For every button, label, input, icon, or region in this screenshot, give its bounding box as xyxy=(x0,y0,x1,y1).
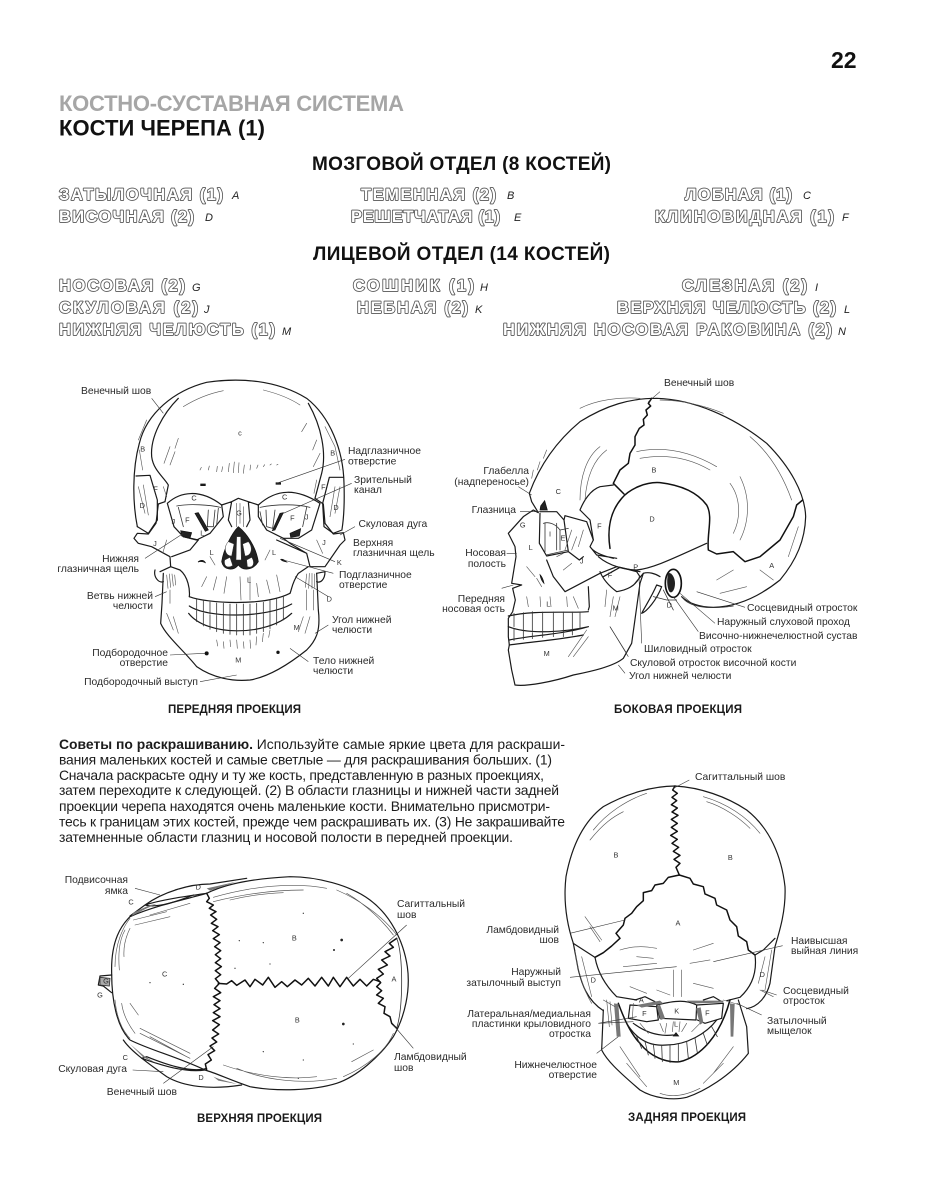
skull drawing: back view: M xyxy=(673,1078,679,1087)
skull drawing: side view: B xyxy=(652,466,657,475)
skull drawing: front view: C xyxy=(191,494,197,503)
legend: facial bones: N xyxy=(838,326,846,338)
labels: side view xyxy=(442,378,858,682)
skull drawing: front view: B xyxy=(140,445,145,454)
labels: back view: отросток xyxy=(783,996,825,1007)
labels: back view: пластинки крыловидного xyxy=(472,1019,591,1030)
legend: facial bones: ВЕРХНЯЯ ЧЕЛЮСТЬ (2) xyxy=(617,299,836,317)
skull drawing: top view: B xyxy=(292,933,297,942)
labels: back view: отростка xyxy=(549,1029,591,1040)
skull drawing: front view: L xyxy=(210,548,214,557)
labels: side view: Глабелла xyxy=(483,465,529,477)
coloring tips text block: затем переходите к следующей. (2) В области глазницы и нижней части задней xyxy=(59,782,559,798)
labels: back view: выйная линия xyxy=(791,946,858,957)
skull drawing: front view: C xyxy=(282,492,288,501)
skull drawing: side view: A xyxy=(769,561,774,570)
skull drawing: front view: L xyxy=(247,575,251,584)
coloring tips text block: затемненные области глазниц и носовой полости в передней проекции. xyxy=(59,829,513,845)
skull drawing: front view: F xyxy=(290,514,295,523)
legend: facial bones: НИЖНЯЯ ЧЕЛЮСТЬ (1) xyxy=(59,321,275,339)
labels: top view: Скуловая дуга xyxy=(58,1064,127,1075)
panel: side view xyxy=(442,378,858,716)
labels: back view: Сосцевидный xyxy=(783,986,849,997)
legend: facial bones: СКУЛОВАЯ (2) xyxy=(59,299,198,317)
skull drawing: back view: L xyxy=(674,1020,678,1029)
labels: top view: Подвисочная xyxy=(65,875,128,886)
skull drawing: top view: A xyxy=(392,974,397,983)
skull drawing: side view: D xyxy=(649,515,655,524)
labels: front view: челюсти xyxy=(332,625,372,636)
labels: side view: Венечный шов xyxy=(664,378,735,389)
labels: side view: Глазница xyxy=(472,505,516,516)
legend: cranial bones: A xyxy=(231,190,239,202)
labels: back view: мыщелок xyxy=(767,1026,812,1037)
coloring tips text block: вания маленьких костей и самые светлые — для раскрашивания больших. (1) xyxy=(59,752,552,768)
labels: front view: Ветвь нижней xyxy=(87,591,153,602)
skull drawing: front view: D xyxy=(327,595,332,604)
heading: facial division: ЛИЦЕВОЙ ОТДЕЛ (14 КОСТЕЙ) xyxy=(313,243,610,265)
skull drawing: top view xyxy=(97,877,413,1090)
legend: facial bones: H xyxy=(480,282,488,294)
labels: back view: Затылочный xyxy=(767,1016,827,1027)
labels: top view xyxy=(58,875,467,1098)
legend: facial bones: НИЖНЯЯ НОСОВАЯ РАКОВИНА (2) xyxy=(503,321,832,339)
heading: cranial division: МОЗГОВОЙ ОТДЕЛ (8 КОСТЕЙ) xyxy=(312,153,611,175)
skull drawing: front view: J xyxy=(171,517,175,526)
labels: back view: Ламбдовидный xyxy=(486,924,559,936)
labels: side view: Сосцевидный отросток xyxy=(747,603,858,614)
labels: top view: Ламбдовидный xyxy=(394,1051,467,1063)
skull drawing: front view: D xyxy=(140,501,145,510)
panel: top view xyxy=(58,875,467,1125)
labels: front view: Угол нижней xyxy=(332,615,392,626)
labels: front view: Тело нижней xyxy=(313,656,375,667)
skull drawing: back view: F xyxy=(705,1008,710,1017)
labels: back view xyxy=(466,772,858,1081)
skull drawing: side view: J xyxy=(580,556,584,565)
legend: facial bones: СЛЕЗНАЯ (2) xyxy=(682,277,807,295)
labels: side view: полость xyxy=(468,559,506,570)
labels: side view: (надпереносье) xyxy=(454,477,529,488)
legend: facial bones: НОСОВАЯ (2) xyxy=(59,277,185,295)
legend: cranial bones: D xyxy=(205,212,213,224)
skull drawing: front view: F xyxy=(185,515,190,524)
labels: top view: шов xyxy=(394,1063,414,1074)
labels: back view: Нижнечелюстное xyxy=(514,1060,597,1071)
skull drawing: side view: E xyxy=(561,534,566,543)
skull drawing: front view: M xyxy=(235,656,241,665)
legend: cranial bones xyxy=(59,186,850,226)
skull drawing: top view: B xyxy=(295,1016,300,1025)
labels: back view: Латеральная/медиальная xyxy=(467,1009,591,1020)
skull drawing: top view: C xyxy=(128,898,134,907)
panel: front view xyxy=(57,380,435,716)
legend: cranial bones: B xyxy=(507,190,514,202)
legend: facial bones: J xyxy=(203,304,210,316)
labels: top view: Венечный шов xyxy=(107,1087,178,1098)
labels: front view: глазничная щель xyxy=(57,564,139,575)
labels: back view: Наружный xyxy=(511,967,561,978)
skull drawing: top view: D xyxy=(198,1073,204,1082)
skull drawing: side view: F xyxy=(608,570,613,579)
skull drawing: back view: A xyxy=(676,918,681,927)
labels: back view: Сагиттальный шов xyxy=(695,772,786,783)
labels: front view xyxy=(57,386,435,688)
skull drawing: front view: L xyxy=(272,548,276,557)
skull drawing: top view: G xyxy=(97,990,103,999)
caption: side view: БОКОВАЯ ПРОЕКЦИЯ xyxy=(614,704,742,716)
coloring tips text block xyxy=(59,736,565,845)
legend: cranial bones: F xyxy=(842,212,850,224)
labels: side view: Шиловидный отросток xyxy=(644,644,752,655)
legend: cranial bones: ВИСОЧНАЯ (2) xyxy=(59,208,194,226)
skull drawing: side view: F xyxy=(597,521,602,530)
skull drawing: back view: D xyxy=(760,970,765,979)
legend: cranial bones: РЕШЕТЧАТАЯ (1) xyxy=(351,208,500,226)
labels: front view: Венечный шов xyxy=(81,386,152,397)
skull drawing: back view: K xyxy=(674,1006,679,1015)
legend: cranial bones: E xyxy=(514,212,522,224)
legend: facial bones: G xyxy=(192,282,201,294)
labels: front view: отверстие xyxy=(120,658,168,669)
skull drawing: back view: B xyxy=(728,853,733,862)
labels: side view: носовая ость xyxy=(442,604,505,615)
skull drawing: front view: G xyxy=(236,509,242,518)
labels: front view: Подбородочный выступ xyxy=(84,676,198,688)
labels: side view: Носовая xyxy=(465,548,506,559)
labels: back view: шов xyxy=(540,935,560,946)
skull drawing: front view xyxy=(134,380,355,682)
skull drawing: front view: J xyxy=(322,538,326,547)
legend: facial bones: I xyxy=(815,282,818,294)
title: КОСТИ ЧЕРЕПА (1) xyxy=(59,116,265,140)
skull drawing: side view: C xyxy=(556,487,562,496)
legend: facial bones: K xyxy=(475,304,483,316)
labels: front view: челюсти xyxy=(113,601,153,612)
labels: front view: Подбородочное xyxy=(92,647,168,659)
labels: side view: Наружный слуховой проход xyxy=(717,617,850,628)
skull drawing: side view: I xyxy=(549,530,551,539)
skull drawing: top view: C xyxy=(162,969,168,978)
labels: front view: Верхняя xyxy=(353,538,393,549)
labels: front view: Скуловая дуга xyxy=(358,519,428,530)
skull drawing: back view: D xyxy=(591,975,596,984)
labels: front view: Подглазничное xyxy=(339,570,412,581)
panel: back view xyxy=(466,772,858,1124)
labels: side view: Передняя xyxy=(458,594,505,605)
labels: top view: Сагиттальный xyxy=(397,899,465,910)
labels: back view: отверстие xyxy=(549,1070,597,1081)
skull drawing: front view: L xyxy=(200,529,204,538)
labels: front view: отверстие xyxy=(348,456,397,468)
skull drawing: top view: G xyxy=(103,977,109,986)
labels: front view: Зрительный xyxy=(354,475,412,486)
coloring tips text block: Сначала раскрасьте одну и ту же кость, представленную в разных проекциях, xyxy=(59,767,544,783)
legend: facial bones: M xyxy=(282,326,292,338)
skull drawing: back view: A xyxy=(639,996,644,1005)
caption: front view: ПЕРЕДНЯЯ ПРОЕКЦИЯ xyxy=(168,704,301,716)
coloring tips text block: тесь к границам этих костей, прежде чем раскрашивать их. (3) Не закрашивайте xyxy=(59,814,565,830)
skull drawing: side view: M xyxy=(613,604,619,613)
coloring tips text block: проекции черепа находятся очень маленькие кости. Внимательно присмотри- xyxy=(59,798,550,814)
caption: top view: ВЕРХНЯЯ ПРОЕКЦИЯ xyxy=(197,1113,322,1125)
labels: back view: Наивысшая xyxy=(791,936,848,947)
legend: cranial bones: ЛОБНАЯ (1) xyxy=(685,186,792,204)
skull drawing: front view: F xyxy=(153,485,158,494)
skull drawing: side view: L xyxy=(529,543,533,552)
skull drawing: top view: C xyxy=(123,1053,129,1062)
labels: top view: ямка xyxy=(105,886,128,897)
skull drawing: front view: c xyxy=(238,429,242,438)
legend: facial bones: СОШНИК (1) xyxy=(353,277,474,295)
skull drawing: side view: D xyxy=(667,600,672,609)
skull drawing: side view xyxy=(502,392,806,685)
labels: front view: челюсти xyxy=(313,666,353,677)
legend: facial bones: L xyxy=(844,304,850,316)
legend: cranial bones: ТЕМЕННАЯ (2) xyxy=(361,186,496,204)
legend: cranial bones: КЛИНОВИДНАЯ (1) xyxy=(655,208,834,226)
skull drawing: side view: G xyxy=(520,520,526,529)
skull drawing: front view: J xyxy=(153,539,157,548)
skull drawing: back view: B xyxy=(614,851,619,860)
skull drawing: front view: D xyxy=(333,503,339,512)
legend: cranial bones: ЗАТЫЛОЧНАЯ (1) xyxy=(59,186,223,204)
legend: cranial bones: C xyxy=(803,190,811,202)
legend: facial bones: НЕБНАЯ (2) xyxy=(357,299,468,317)
labels: side view: Угол нижней челюсти xyxy=(629,671,732,682)
skull drawing: top view: D xyxy=(196,882,201,891)
labels: front view: Нижняя xyxy=(102,554,139,565)
skull drawing: front view: M xyxy=(294,623,300,632)
skull drawing: back view: F xyxy=(642,1009,647,1018)
skull drawing: front view: F xyxy=(321,482,326,491)
skull drawing: side view: M xyxy=(544,649,550,658)
labels: front view: отверстие xyxy=(339,580,388,591)
section heading: КОСТНО-СУСТАВНАЯ СИСТЕМА xyxy=(59,91,404,116)
caption: back view: ЗАДНЯЯ ПРОЕКЦИЯ xyxy=(628,1112,746,1124)
labels: front view: канал xyxy=(354,485,382,496)
page number: 22 xyxy=(831,47,857,73)
skull drawing: front view: K xyxy=(337,558,342,567)
coloring tips text block: Советы по раскрашиванию. Используйте самые яркие цвета для раскраши- xyxy=(59,736,565,752)
skull drawing: side view: L xyxy=(546,600,550,609)
skull drawing: front view: B xyxy=(330,448,335,457)
labels: side view: Скуловой отросток височной кости xyxy=(630,658,797,669)
skull drawing: back view xyxy=(565,780,785,1099)
labels: back view: затылочный выступ xyxy=(466,978,561,989)
labels: front view: глазничная щель xyxy=(353,548,435,559)
legend: facial bones xyxy=(59,277,850,339)
skull drawing: side view: P xyxy=(633,562,638,571)
labels: front view: Надглазничное xyxy=(348,446,421,457)
labels: side view: Височно-нижнечелюстной сустав xyxy=(699,631,858,642)
skull drawing: front view: J xyxy=(305,512,309,521)
labels: top view: шов xyxy=(397,910,417,921)
